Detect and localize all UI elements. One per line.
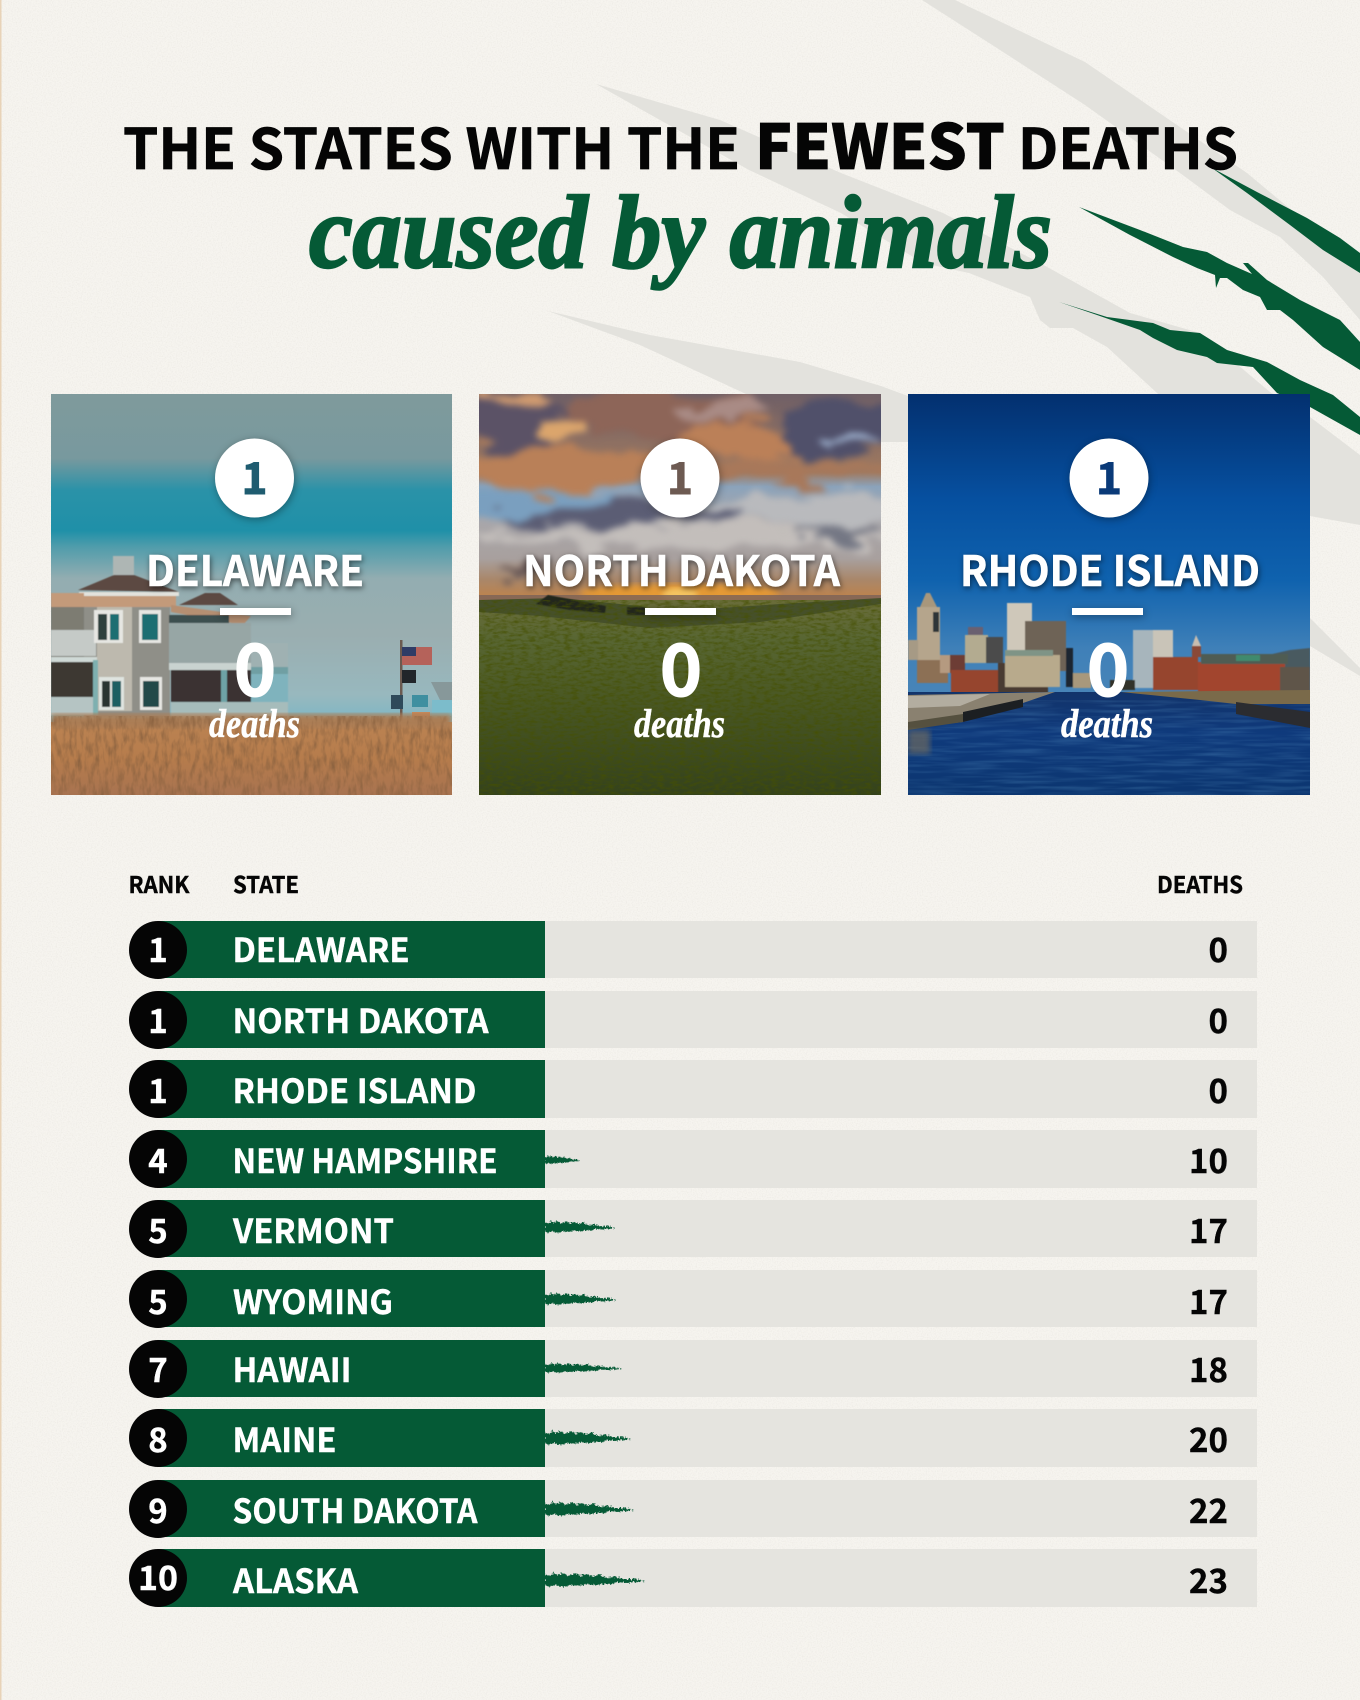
title xyxy=(123,97,1238,187)
rank badge xyxy=(1070,438,1148,518)
row: Rhode Island: 1 xyxy=(148,1065,168,1113)
death count: 0 xyxy=(1087,612,1129,717)
deaths label: deaths xyxy=(1061,701,1153,746)
subtitle: caused by animals xyxy=(309,175,1052,290)
row: Rhode Island: RHODE ISLAND xyxy=(232,1065,476,1113)
row: Maine: 20 xyxy=(1189,1414,1228,1462)
row: South Dakota xyxy=(129,1480,1257,1538)
photo: prairie sunset xyxy=(479,394,881,795)
row: North Dakota: 0 xyxy=(1209,995,1228,1043)
row: New Hampshire: NEW HAMPSHIRE xyxy=(232,1135,498,1183)
title: FEWEST xyxy=(755,97,1005,187)
panel: Rhode Island xyxy=(908,394,1310,795)
row: Alaska: 10 xyxy=(138,1552,178,1600)
photo: beach house xyxy=(51,394,452,795)
row: Vermont: VERMONT xyxy=(232,1205,394,1253)
row: Delaware: 0 xyxy=(1209,924,1228,972)
row: New Hampshire: 10 xyxy=(1189,1135,1228,1183)
rank badge: 1 xyxy=(667,443,693,507)
row: Alaska: ALASKA xyxy=(232,1555,359,1603)
title: DEATHS xyxy=(1018,105,1238,186)
row: Rhode Island: 0 xyxy=(1209,1065,1228,1113)
row: North Dakota xyxy=(129,991,1257,1049)
green claw scratches xyxy=(1059,168,1360,435)
row: South Dakota: 9 xyxy=(148,1485,168,1533)
row: Wyoming xyxy=(129,1270,1257,1328)
row: Vermont: 5 xyxy=(148,1205,168,1253)
table header xyxy=(128,866,1243,900)
title: THE STATES WITH THE xyxy=(123,105,740,186)
divider xyxy=(220,608,291,615)
row: Wyoming: 5 xyxy=(148,1276,168,1324)
row: Maine: 8 xyxy=(148,1414,168,1462)
panel: Delaware xyxy=(51,394,452,795)
row: South Dakota: 22 xyxy=(1189,1485,1228,1533)
row: New Hampshire xyxy=(129,1130,1257,1188)
row: Delaware: 1 xyxy=(148,924,168,972)
row: New Hampshire: 4 xyxy=(148,1135,168,1183)
state name: NORTH DAKOTA xyxy=(523,538,841,599)
row: Hawaii: HAWAII xyxy=(232,1344,352,1392)
row: Alaska xyxy=(129,1549,1257,1607)
death count: 0 xyxy=(234,612,276,717)
row: Delaware xyxy=(129,921,1257,979)
row: Hawaii xyxy=(129,1340,1257,1398)
deaths label: deaths xyxy=(634,701,725,746)
row: North Dakota: 1 xyxy=(148,995,168,1043)
rank badge: 1 xyxy=(1096,443,1122,507)
photo: city river xyxy=(908,394,1310,795)
row: Vermont xyxy=(129,1200,1257,1258)
row: Hawaii: 18 xyxy=(1189,1344,1228,1392)
table: state rankings xyxy=(129,921,1257,1607)
row: North Dakota: NORTH DAKOTA xyxy=(232,995,489,1043)
rank badge xyxy=(640,438,720,518)
row: Maine xyxy=(129,1409,1257,1467)
state name: DELAWARE xyxy=(146,538,364,599)
divider xyxy=(1072,608,1143,615)
table header: RANK xyxy=(128,866,190,900)
state name: RHODE ISLAND xyxy=(960,538,1260,599)
table header: STATE xyxy=(233,866,299,900)
row: Vermont: 17 xyxy=(1189,1205,1228,1253)
gray claw scratches xyxy=(548,0,1360,676)
row: Wyoming: WYOMING xyxy=(233,1276,393,1324)
row: Delaware: DELAWARE xyxy=(232,924,410,972)
row: Rhode Island xyxy=(129,1060,1257,1118)
row: Maine: MAINE xyxy=(232,1414,336,1462)
row: Hawaii: 7 xyxy=(148,1344,168,1392)
panel: North Dakota xyxy=(479,394,881,795)
table header: DEATHS xyxy=(1157,866,1243,900)
row: South Dakota: SOUTH DAKOTA xyxy=(232,1485,478,1533)
death count: 0 xyxy=(660,612,702,717)
row: Alaska: 23 xyxy=(1189,1555,1228,1603)
divider xyxy=(645,608,716,615)
rank badge: 1 xyxy=(242,443,267,507)
row: Wyoming: 17 xyxy=(1189,1276,1228,1324)
rank badge xyxy=(215,438,294,518)
deaths label: deaths xyxy=(209,701,300,746)
